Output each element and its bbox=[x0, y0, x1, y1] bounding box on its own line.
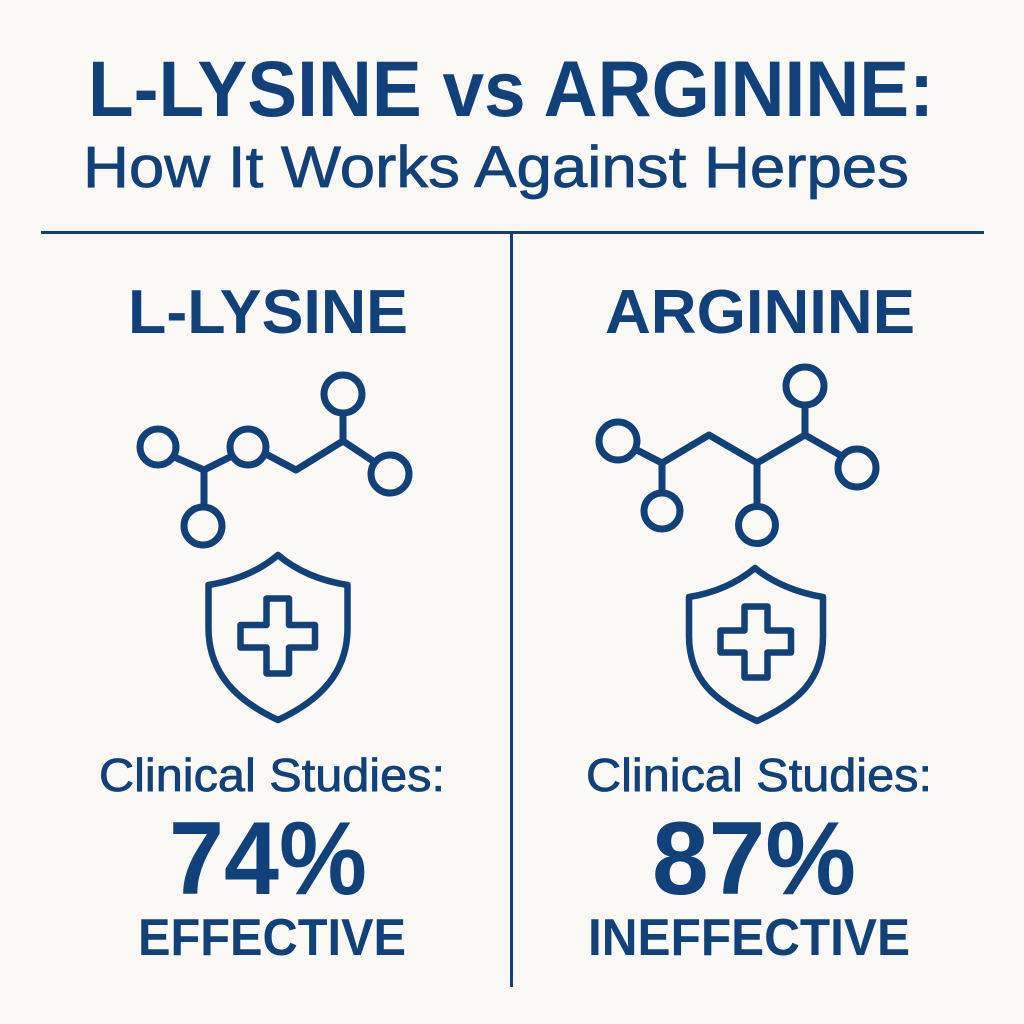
icon: Arginine molecule bbox=[599, 367, 876, 544]
panel: L-Lysine bbox=[99, 278, 445, 967]
Arginine heading: ARGININE bbox=[605, 278, 915, 347]
panel: Arginine bbox=[586, 278, 932, 967]
vertical divider bbox=[510, 234, 513, 987]
L-Lysine clinical studies label: Clinical Studies: bbox=[99, 749, 445, 801]
L-Lysine percentage: 74% bbox=[169, 801, 367, 917]
title: L-LYSINE vs ARGININE: bbox=[88, 44, 934, 133]
Arginine clinical studies label: Clinical Studies: bbox=[586, 749, 932, 801]
horizontal divider bbox=[41, 231, 984, 234]
L-Lysine heading: L-LYSINE bbox=[128, 278, 408, 347]
Arginine effectiveness label: INEFFECTIVE bbox=[588, 909, 910, 967]
icon: L-Lysine molecule bbox=[140, 375, 409, 545]
icon: L-Lysine shield bbox=[208, 555, 348, 720]
L-Lysine effectiveness label: EFFECTIVE bbox=[138, 909, 406, 967]
icon: Arginine shield bbox=[689, 568, 823, 721]
Arginine percentage: 87% bbox=[652, 801, 856, 917]
subtitle: How It Works Against Herpes bbox=[83, 135, 909, 200]
